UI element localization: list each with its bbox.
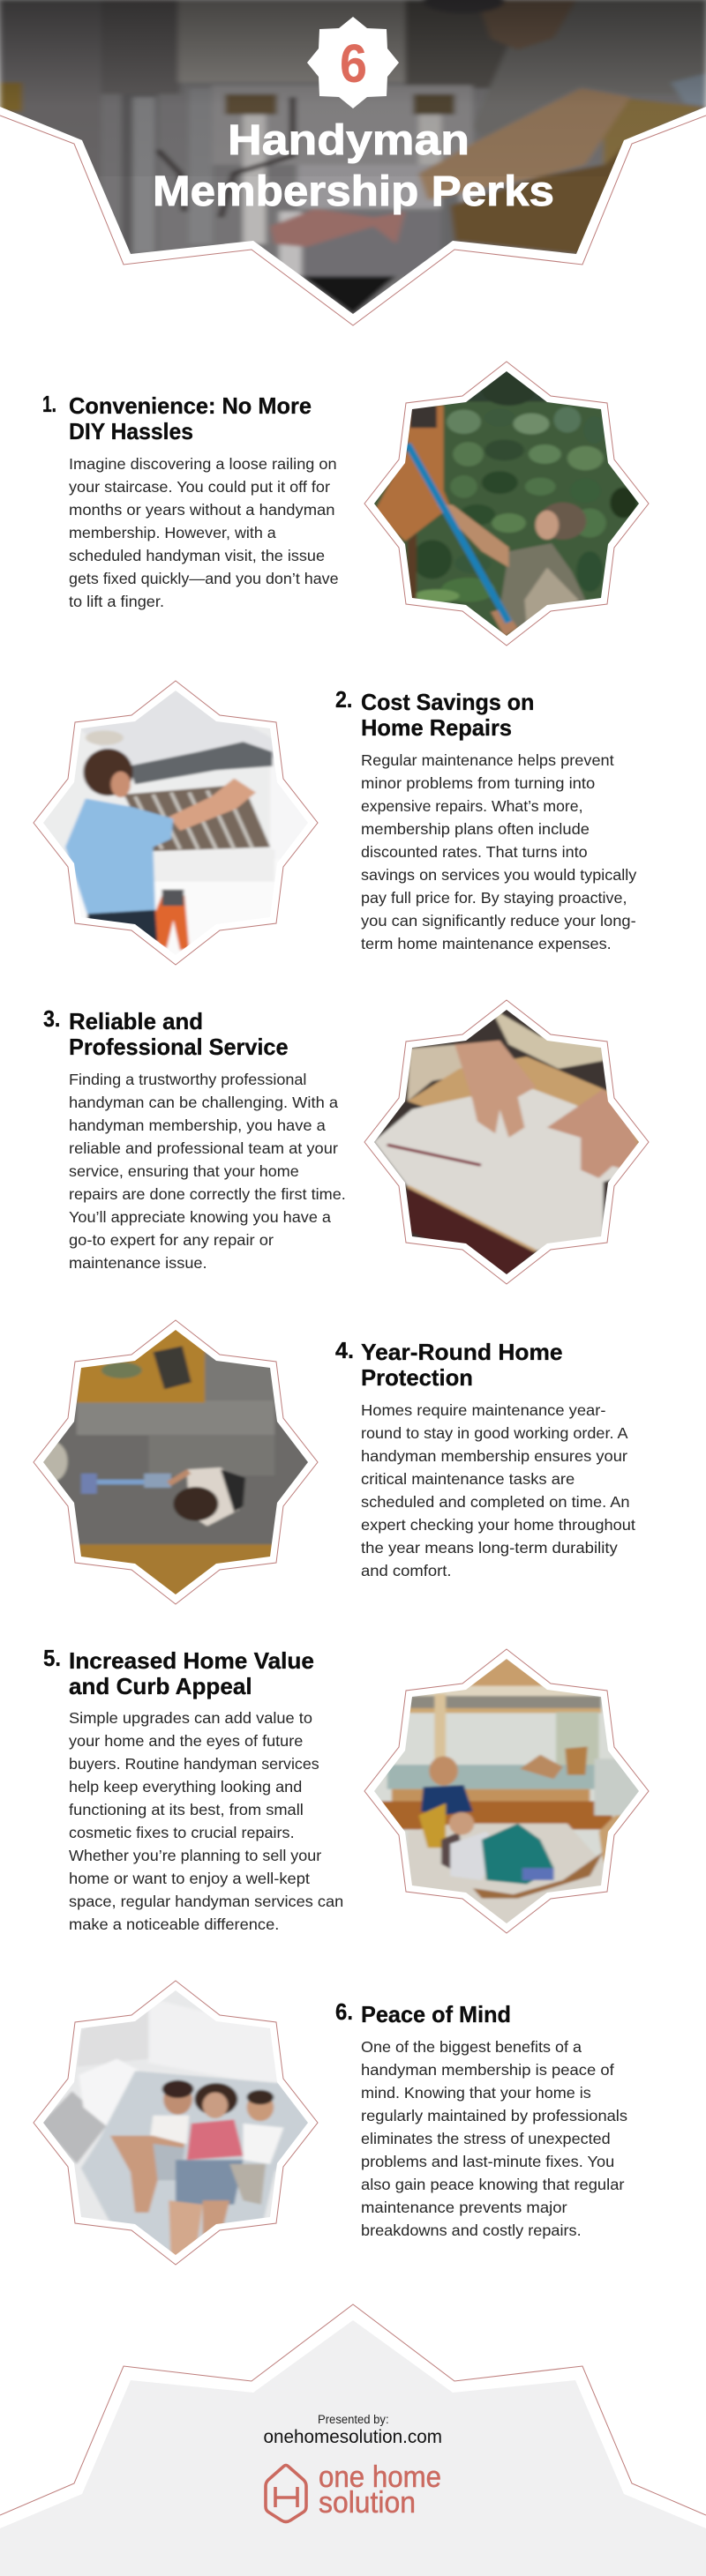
body text: membership. However, with a	[69, 524, 276, 541]
photo star: children playing by a bunk bed	[360, 1646, 657, 1941]
body text: handyman can be challenging. With a	[69, 1094, 338, 1111]
header outline	[0, 116, 706, 325]
body text: handyman membership is peace of	[361, 2061, 614, 2079]
heading: DIY Hassles	[69, 418, 193, 444]
header banner	[0, 0, 706, 353]
photo star outline	[364, 1649, 649, 1933]
body text: scheduled and completed on time. An	[361, 1493, 630, 1511]
photo star outline	[34, 1320, 318, 1604]
panel: perk 5	[43, 1645, 657, 1941]
heading: Year-Round Home	[361, 1339, 563, 1365]
heading: Increased Home Value	[69, 1647, 314, 1674]
body text	[69, 1071, 346, 1272]
body text: reliable and professional team at your	[69, 1139, 338, 1157]
body text: repairs are done correctly the first time.	[69, 1185, 346, 1203]
body text: Finding a trustworthy professional	[69, 1071, 306, 1088]
body text: Imagine discovering a loose railing on	[69, 455, 337, 473]
number 3: 3.	[43, 1005, 60, 1032]
heading: Peace of Mind	[361, 2001, 511, 2027]
body text: also gain peace knowing that regular	[361, 2176, 625, 2193]
number 4: 4.	[335, 1337, 354, 1363]
body text: minor problems from turning into	[361, 774, 595, 792]
heading	[69, 1008, 288, 1060]
body text: space, regular handyman services can	[69, 1893, 343, 1910]
heading: Cost Savings on	[361, 689, 534, 715]
body text: to lift a finger.	[69, 593, 164, 610]
heading	[69, 1647, 314, 1699]
photo star: technician changing air filter	[34, 681, 318, 965]
heading: Professional Service	[69, 1034, 288, 1060]
body text: gets fixed quickly—and you don’t have	[69, 570, 339, 587]
body text: regularly maintained by professionals	[361, 2107, 627, 2124]
body text: cosmetic fixes to crucial repairs.	[69, 1824, 295, 1841]
body text: expensive repairs. What’s more,	[361, 797, 582, 815]
number 6: 6.	[335, 1998, 353, 2025]
body text: One of the biggest benefits of a	[361, 2038, 582, 2056]
photo star: man with blue pole in forest	[364, 362, 650, 646]
photo star: family relaxing on a bed	[34, 1981, 318, 2265]
body text: expert checking your home throughout	[361, 1516, 635, 1534]
logo wordmark: one home	[319, 2460, 441, 2494]
body text: go-to expert for any repair or	[69, 1231, 274, 1249]
body text: and comfort.	[361, 1562, 452, 1579]
body text: Homes require maintenance year-	[361, 1401, 606, 1419]
photo star outline	[364, 1000, 649, 1284]
heading: Convenience: No More	[69, 392, 312, 419]
footer grey shape	[0, 2320, 706, 2576]
body text	[69, 1709, 343, 1933]
title	[153, 117, 554, 215]
body text: functioning at its best, from small	[69, 1801, 304, 1818]
body text: your staircase. You could put it off for	[69, 478, 330, 496]
body text	[361, 751, 637, 952]
logo wordmark: solution	[319, 2486, 416, 2520]
panel: perk 1	[43, 362, 650, 646]
body text	[69, 455, 339, 610]
title: Handyman	[228, 117, 469, 164]
body text: mind. Knowing that your home is	[361, 2084, 591, 2102]
footer outline	[0, 2304, 706, 2515]
body text: make a noticeable difference.	[69, 1915, 279, 1933]
panel: perk 3	[43, 996, 657, 1295]
photo star: overhead view of woman vacuuming	[34, 1319, 318, 1605]
footer panel	[0, 2304, 706, 2576]
body text: maintenance issue.	[69, 1254, 207, 1272]
body text: scheduled handyman visit, the issue	[69, 547, 325, 564]
heading	[361, 689, 534, 741]
body text: You’ll appreciate knowing you have a	[69, 1208, 331, 1226]
badge: number 6: 6	[340, 34, 367, 93]
number 2: 2.	[335, 686, 352, 713]
photo star outline	[34, 1981, 318, 2265]
presented by label: Presented by:	[318, 2413, 389, 2426]
photo star outline	[364, 362, 649, 646]
badge: number 6	[307, 17, 399, 108]
body text: your home and the eyes of future	[69, 1732, 303, 1750]
body text: critical maintenance tasks are	[361, 1470, 575, 1488]
body text: round to stay in good working order. A	[361, 1424, 628, 1442]
logo icon: house with H	[266, 2466, 306, 2522]
body text	[361, 1401, 635, 1579]
body text: Whether you’re planning to sell your	[69, 1847, 321, 1864]
heading: Reliable and	[69, 1008, 203, 1034]
body text: pay full price for. By staying proactive,	[361, 889, 627, 907]
body text: service, ensuring that your home	[69, 1162, 299, 1180]
body text: handyman membership ensures your	[361, 1447, 627, 1465]
body text: membership plans often include	[361, 820, 590, 838]
body text: Simple upgrades can add value to	[69, 1709, 312, 1727]
panel: perk 2	[18, 673, 637, 973]
body text: discounted rates. That turns into	[361, 843, 588, 861]
body text: Regular maintenance helps prevent	[361, 751, 614, 769]
panel: perk 6	[18, 1978, 627, 2277]
body text: savings on services you would typically	[361, 866, 637, 884]
header photo: plumber under a sink	[0, 0, 706, 314]
body text: problems and last-minute fixes. You	[361, 2153, 614, 2170]
heading	[361, 1339, 563, 1391]
number 5: 5.	[43, 1645, 61, 1671]
body text	[361, 2038, 627, 2239]
body text: buyers. Routine handyman services	[69, 1755, 319, 1773]
logo: one home solution	[266, 2460, 441, 2522]
body text: the year means long-term durability	[361, 1539, 618, 1557]
photo star outline	[34, 681, 318, 965]
number 1: 1.	[42, 391, 56, 417]
body text: home or want to enjoy a well-kept	[69, 1870, 310, 1887]
body text: breakdowns and costly repairs.	[361, 2221, 582, 2239]
title: Membership Perks	[153, 168, 554, 215]
photo star: hands on a white board	[360, 996, 657, 1295]
heading	[69, 392, 312, 444]
logo wordmark	[319, 2460, 441, 2520]
body text: months or years without a handyman	[69, 501, 335, 519]
heading: and Curb Appeal	[69, 1673, 252, 1699]
body text: you can significantly reduce your long-	[361, 912, 636, 930]
body text: help keep everything looking and	[69, 1778, 302, 1796]
body text: eliminates the stress of unexpected	[361, 2130, 611, 2147]
body text: handyman membership, you have a	[69, 1116, 326, 1134]
heading: Protection	[361, 1364, 473, 1391]
panel: perk 4	[18, 1311, 635, 1611]
body text: maintenance prevents major	[361, 2199, 567, 2216]
body text: term home maintenance expenses.	[361, 935, 612, 952]
heading: Home Repairs	[361, 714, 512, 741]
website: onehomesolution.com	[263, 2427, 442, 2447]
